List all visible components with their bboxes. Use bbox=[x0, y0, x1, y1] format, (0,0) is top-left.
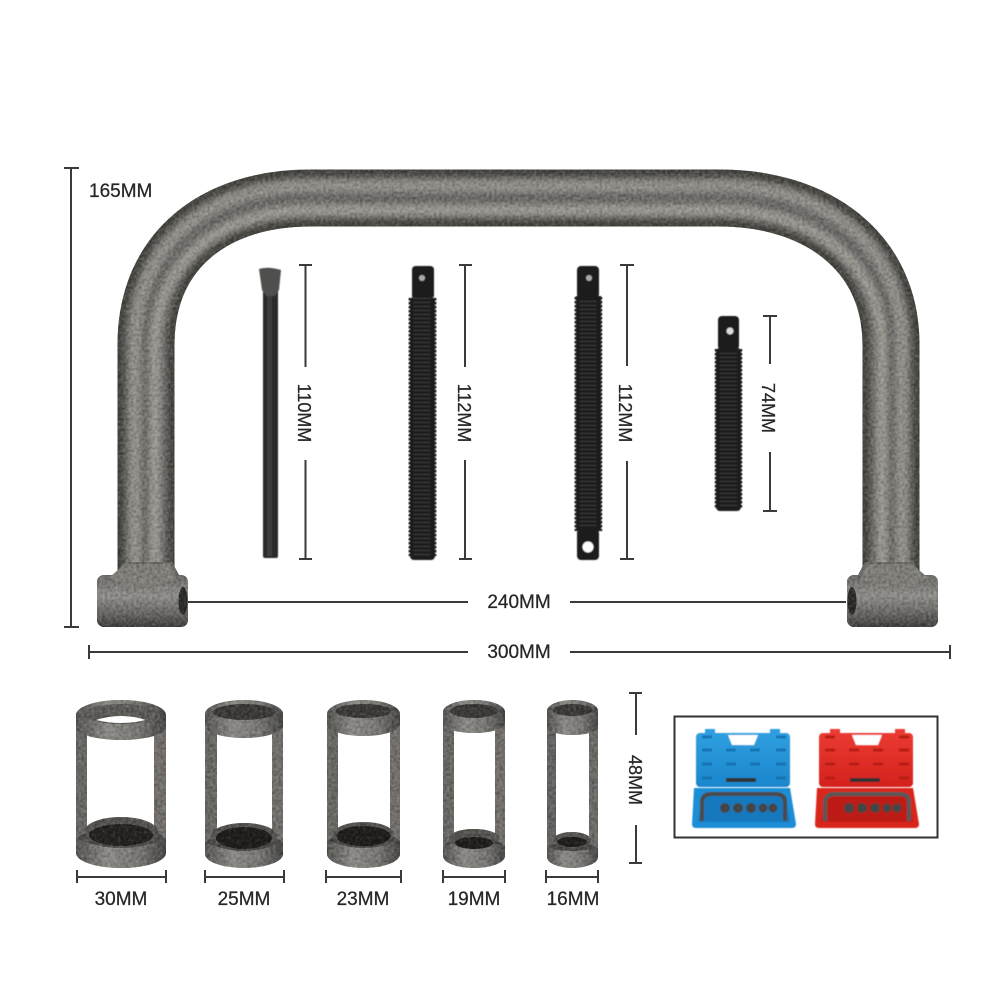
dimension: 74MM bolt 3 bbox=[758, 316, 778, 511]
adapter cage 25MM bbox=[205, 700, 283, 868]
dimension: 19MM bbox=[443, 870, 505, 910]
dimension: 25MM bbox=[205, 870, 284, 910]
dimension: 23MM bbox=[326, 870, 401, 910]
dimension: 110MM rod bbox=[294, 265, 314, 559]
tool: threaded bolt 3 bbox=[716, 316, 741, 511]
inset: carrying cases bbox=[674, 716, 938, 838]
adapter cage 30MM bbox=[76, 700, 166, 868]
dimension: 30MM: 30MM bbox=[95, 889, 147, 910]
dimension: 48MM cage height: 48MM bbox=[625, 755, 645, 805]
U-shaped compressor frame bbox=[97, 186, 938, 627]
dimension: 110MM rod: 110MM bbox=[294, 384, 314, 442]
adapter cage 16MM bbox=[547, 700, 598, 868]
dimension: 300MM overall width: 300MM bbox=[487, 642, 551, 663]
dimension: 112MM bolt 2 bbox=[615, 265, 635, 559]
dimension: 112MM bolt 1: 112MM bbox=[454, 384, 474, 442]
red case bbox=[815, 729, 919, 828]
dimension: 16MM: 16MM bbox=[547, 889, 599, 910]
dimension: 30MM bbox=[77, 870, 166, 910]
left foot bbox=[97, 562, 188, 627]
dimension: 19MM: 19MM bbox=[448, 889, 500, 910]
dimension: 240MM inner width: 240MM bbox=[487, 592, 551, 613]
dimension: 300MM overall width bbox=[89, 642, 950, 663]
dimension: 165MM height: 165MM bbox=[89, 181, 152, 202]
dimension: 16MM bbox=[546, 870, 599, 910]
dimension: 48MM cage height bbox=[625, 693, 645, 863]
adapter cage 19MM bbox=[443, 700, 505, 868]
blue case bbox=[692, 729, 796, 828]
dimension: 112MM bolt 2: 112MM bbox=[615, 384, 635, 442]
tool: threaded bolt 2 bbox=[576, 266, 601, 560]
dimension: 25MM: 25MM bbox=[218, 889, 270, 910]
tool: pin rod bbox=[259, 268, 281, 558]
dimension: 23MM: 23MM bbox=[337, 889, 389, 910]
tool: threaded bolt 1 bbox=[410, 266, 435, 560]
right foot bbox=[847, 562, 938, 627]
dimension: 112MM bolt 1 bbox=[454, 265, 474, 559]
dimension: 165MM height bbox=[64, 168, 152, 627]
dimension: 74MM bolt 3: 74MM bbox=[758, 383, 778, 433]
adapter cage 23MM bbox=[327, 700, 400, 868]
